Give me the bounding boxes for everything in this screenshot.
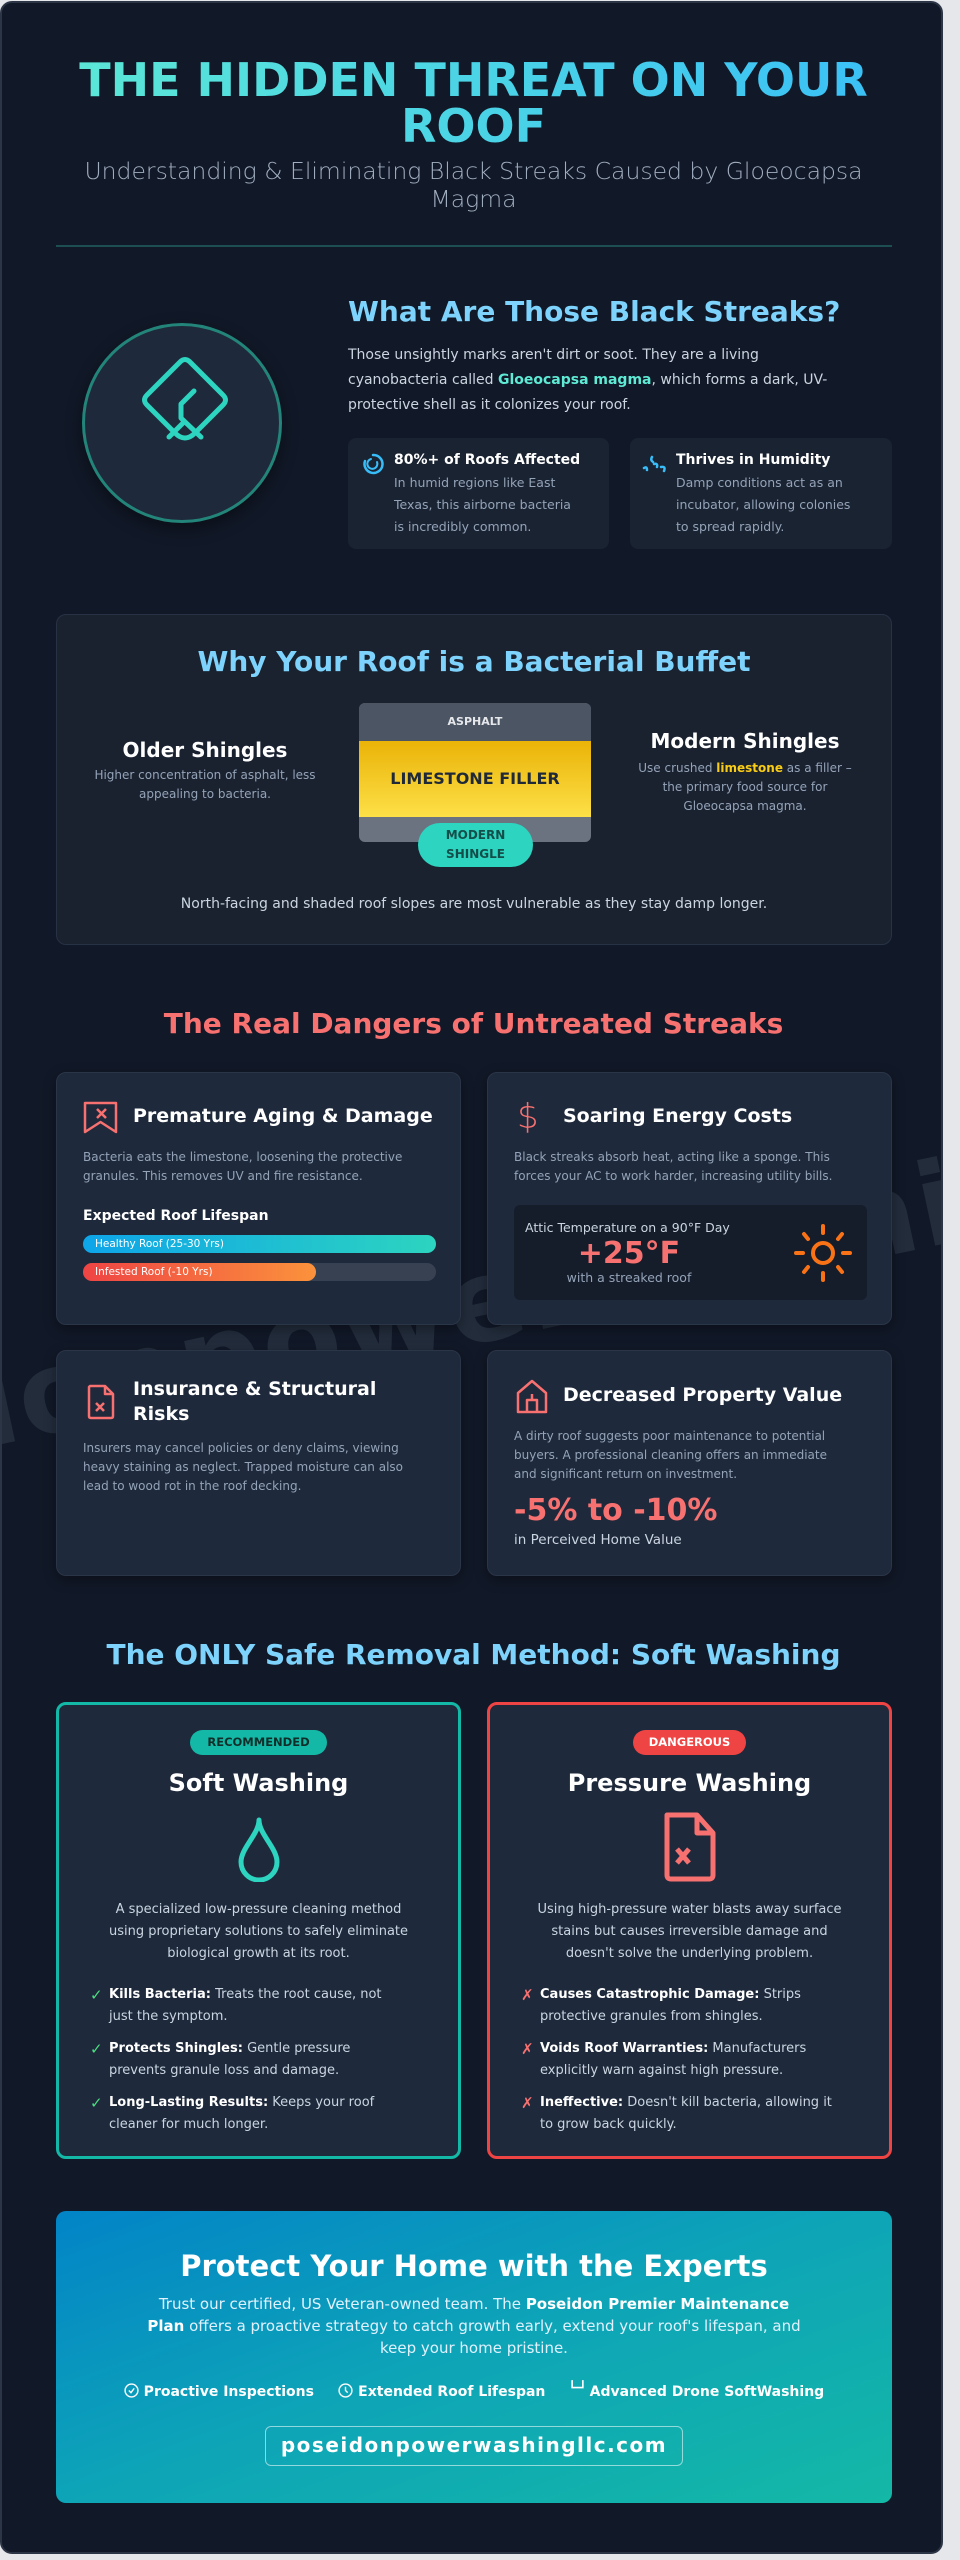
panel: soft washing: using proprietary solutions to safely eliminate — [109, 1924, 408, 1939]
list: benefits: ✓ — [90, 2094, 103, 2112]
list: risks: explicitly warn against high pressure. — [540, 2063, 783, 2078]
panel: pressure washing — [487, 1702, 892, 2159]
card: premature aging: Expected Roof Lifespan — [83, 1208, 269, 1224]
diagram: shingle layers — [359, 703, 591, 867]
card: energy costs: forces your AC to work harder, increasing utility bills. — [514, 1169, 832, 1183]
badge: recommended — [190, 1730, 327, 1755]
panel: soft washing: Soft Washing — [169, 1769, 348, 1797]
card: property value: -5% to -10% — [514, 1493, 717, 1528]
card: property value: A dirty roof suggests poor maintenance to potential — [514, 1429, 825, 1443]
heading: Why Your Roof is a Bacterial Buffet — [197, 645, 751, 678]
list: risks: Ineffective: Doesn't kill bacteria, allowing it — [540, 2095, 832, 2110]
stat box: 80% — [348, 438, 609, 549]
bar chart: lifespan: Healthy Roof (25-30 Yrs) — [95, 1238, 224, 1250]
list: benefits: Kills Bacteria: Treats the root cause, not — [109, 1987, 382, 2002]
text: intro paragraph: cyanobacteria called Gloeocapsa magma, which forms a dark, UV- — [348, 372, 827, 388]
diagram: shingle layers: LIMESTONE FILLER — [390, 769, 560, 788]
list: risks: ✗ — [521, 1986, 534, 2004]
list: benefits: ✓ — [90, 1986, 103, 2004]
card: insurance: heavy staining as neglect. Trapped moisture can also — [83, 1460, 403, 1474]
panel: call to action: Protect Your Home with the Experts — [180, 2249, 768, 2283]
icon: sun — [794, 1224, 852, 1282]
list: risks: to grow back quickly. — [540, 2117, 677, 2132]
badge: dangerous — [633, 1730, 746, 1755]
panel: soft washing: A specialized low-pressure cleaning method — [116, 1902, 401, 1917]
text: intro paragraph — [348, 347, 827, 413]
stat box: humidity — [630, 438, 892, 549]
stat box: 80%: Texas, this airborne bacteria — [394, 497, 571, 512]
list: risks: ✗ — [521, 2040, 534, 2058]
callout: attic temperature — [514, 1205, 867, 1300]
card: energy costs: Black streaks absorb heat, acting like a sponge. This — [514, 1150, 830, 1164]
bar chart: lifespan: Infested Roof (-10 Yrs) — [95, 1266, 213, 1278]
heading: what are those black streaks: What Are Those Black Streaks? — [348, 295, 840, 328]
panel: pressure washing: Pressure Washing — [568, 1769, 811, 1797]
list: benefits: Long-Lasting Results: Keeps your roof — [109, 2095, 374, 2110]
card: premature aging: Bacteria eats the limestone, loosening the protective — [83, 1150, 402, 1164]
stat box: humidity: incubator, allowing colonies — [676, 497, 850, 512]
list: benefits: just the symptom. — [109, 2009, 228, 2024]
list: risks: Voids Roof Warranties: Manufacturers — [540, 2041, 806, 2056]
card: premature aging: granules. This removes UV and fire resistance. — [83, 1169, 363, 1183]
card: insurance — [56, 1350, 461, 1576]
card: property value: in Perceived Home Value — [514, 1532, 682, 1548]
list: risks: protective granules from shingles. — [540, 2009, 763, 2024]
card: energy costs: Soaring Energy Costs — [563, 1105, 792, 1127]
url button: poseidonpowerwashingllc.com — [281, 2433, 667, 2457]
note: North-facing and shaded roof slopes are most vulnerable as they stay damp longer. — [181, 896, 767, 912]
panel: pressure washing: doesn't solve the underlying problem. — [566, 1946, 813, 1961]
features row: Proactive Inspections Extended Roof Lifespan Advanced Drone SoftWashing — [144, 2384, 824, 2400]
title — [2, 57, 945, 149]
badge: modern shingle: MODERN — [446, 828, 505, 842]
card: insurance: lead to wood rot in the roof decking. — [83, 1479, 301, 1493]
icon: droplets — [642, 456, 666, 472]
callout: attic temperature: with a streaked roof — [567, 1270, 691, 1285]
list: benefits: ✓ — [90, 2040, 103, 2058]
callout: attic temperature: Attic Temperature on a 90°F Day — [525, 1220, 730, 1235]
icon: ring — [363, 454, 384, 474]
stat box: humidity: Thrives in Humidity — [676, 452, 830, 468]
panel: soft washing: biological growth at its root. — [167, 1946, 350, 1961]
panel: call to action: Trust our certified, US Veteran-owned team. The Poseidon Premier Maintenance — [159, 2295, 789, 2313]
list: risks: ✗ — [521, 2094, 534, 2112]
title: ROOF — [401, 99, 546, 153]
icon: damaged file — [664, 1812, 716, 1882]
card: premature aging: Premature Aging & Damage — [133, 1105, 433, 1127]
icon: bookmark x — [84, 1102, 118, 1134]
subtitle: Magma — [430, 185, 517, 213]
panel: pressure washing: stains but causes irreversible damage and — [551, 1924, 828, 1939]
text: older shingles: Older Shingles — [123, 738, 287, 762]
stat box: humidity: Damp conditions act as an — [676, 475, 843, 490]
subtitle — [84, 157, 863, 213]
icon: dollar: $ — [517, 1097, 539, 1137]
list: benefits: Protects Shingles: Gentle pressure — [109, 2041, 350, 2056]
badge: dangerous: DANGEROUS — [649, 1735, 730, 1749]
panel: soft washing — [56, 1702, 461, 2159]
stat box: 80%: is incredibly common. — [394, 519, 531, 534]
diagram: shingle layers: ASPHALT — [448, 715, 502, 728]
text: modern shingles: Modern Shingles — [651, 729, 839, 753]
heading: soft washing: The ONLY Safe Removal Method: Soft Washing — [106, 1638, 840, 1671]
text: modern shingles: Gloeocapsa magma. — [683, 799, 807, 813]
icon: water drop — [238, 1818, 280, 1882]
list: risks — [521, 1986, 832, 2132]
text: modern shingles — [638, 729, 852, 813]
card: premature aging — [56, 1072, 461, 1325]
text: intro paragraph: protective shell as it colonizes your roof. — [348, 397, 631, 413]
card: property value — [487, 1350, 892, 1576]
panel: pressure washing: Using high-pressure water blasts away surface — [537, 1902, 842, 1917]
badge: recommended: RECOMMENDED — [207, 1735, 310, 1749]
card: insurance: Risks — [133, 1403, 189, 1425]
panel: call to action: Plan offers a proactive strategy to catch growth early, extend your roof's lifespan, and — [147, 2317, 801, 2335]
panel: bacterial buffet — [56, 614, 892, 945]
stat box: humidity: to spread rapidly. — [676, 519, 784, 534]
card: property value: and significant return on investment. — [514, 1467, 737, 1481]
bar chart: lifespan — [83, 1235, 436, 1281]
text: modern shingles: the primary food source for — [663, 780, 827, 794]
text: modern shingles: Use crushed limestone as a filler – — [638, 761, 852, 775]
icon: house — [516, 1380, 548, 1414]
list: benefits: prevents granule loss and damage. — [109, 2063, 339, 2078]
callout: attic temperature: +25°F — [578, 1236, 680, 1271]
card: property value: buyers. A professional cleaning offers an immediate — [514, 1448, 827, 1462]
text: older shingles — [94, 738, 316, 801]
text: intro paragraph: Those unsightly marks aren't dirt or soot. They are a living — [348, 347, 759, 363]
icon: file x — [88, 1384, 114, 1420]
stat box: 80%: In humid regions like East — [394, 475, 555, 490]
badge: modern shingle — [418, 823, 533, 867]
list: risks: Causes Catastrophic Damage: Strips — [540, 1987, 801, 2002]
badge: modern shingle: SHINGLE — [446, 847, 505, 861]
text: older shingles: Higher concentration of asphalt, less — [94, 768, 316, 782]
panel: call to action — [56, 2211, 892, 2503]
text: older shingles: appealing to bacteria. — [139, 787, 271, 801]
panel: call to action: keep your home pristine. — [380, 2339, 568, 2357]
url button — [265, 2426, 683, 2466]
icon: bacteria circle — [82, 323, 282, 523]
card: energy costs — [487, 1072, 892, 1325]
subtitle: Understanding & Eliminating Black Streaks Caused by Gloeocapsa — [84, 157, 863, 185]
list: benefits: cleaner for much longer. — [109, 2117, 268, 2132]
card: insurance: Insurers may cancel policies or deny claims, viewing — [83, 1441, 399, 1455]
list: benefits — [90, 1986, 382, 2132]
card: insurance: Insurance & Structural — [133, 1378, 376, 1400]
heading: real dangers: The Real Dangers of Untreated Streaks — [164, 1007, 783, 1040]
card: property value: Decreased Property Value — [563, 1384, 842, 1406]
stat box: 80%: 80%+ of Roofs Affected — [394, 452, 580, 468]
title: THE HIDDEN THREAT ON YOUR — [79, 53, 868, 107]
